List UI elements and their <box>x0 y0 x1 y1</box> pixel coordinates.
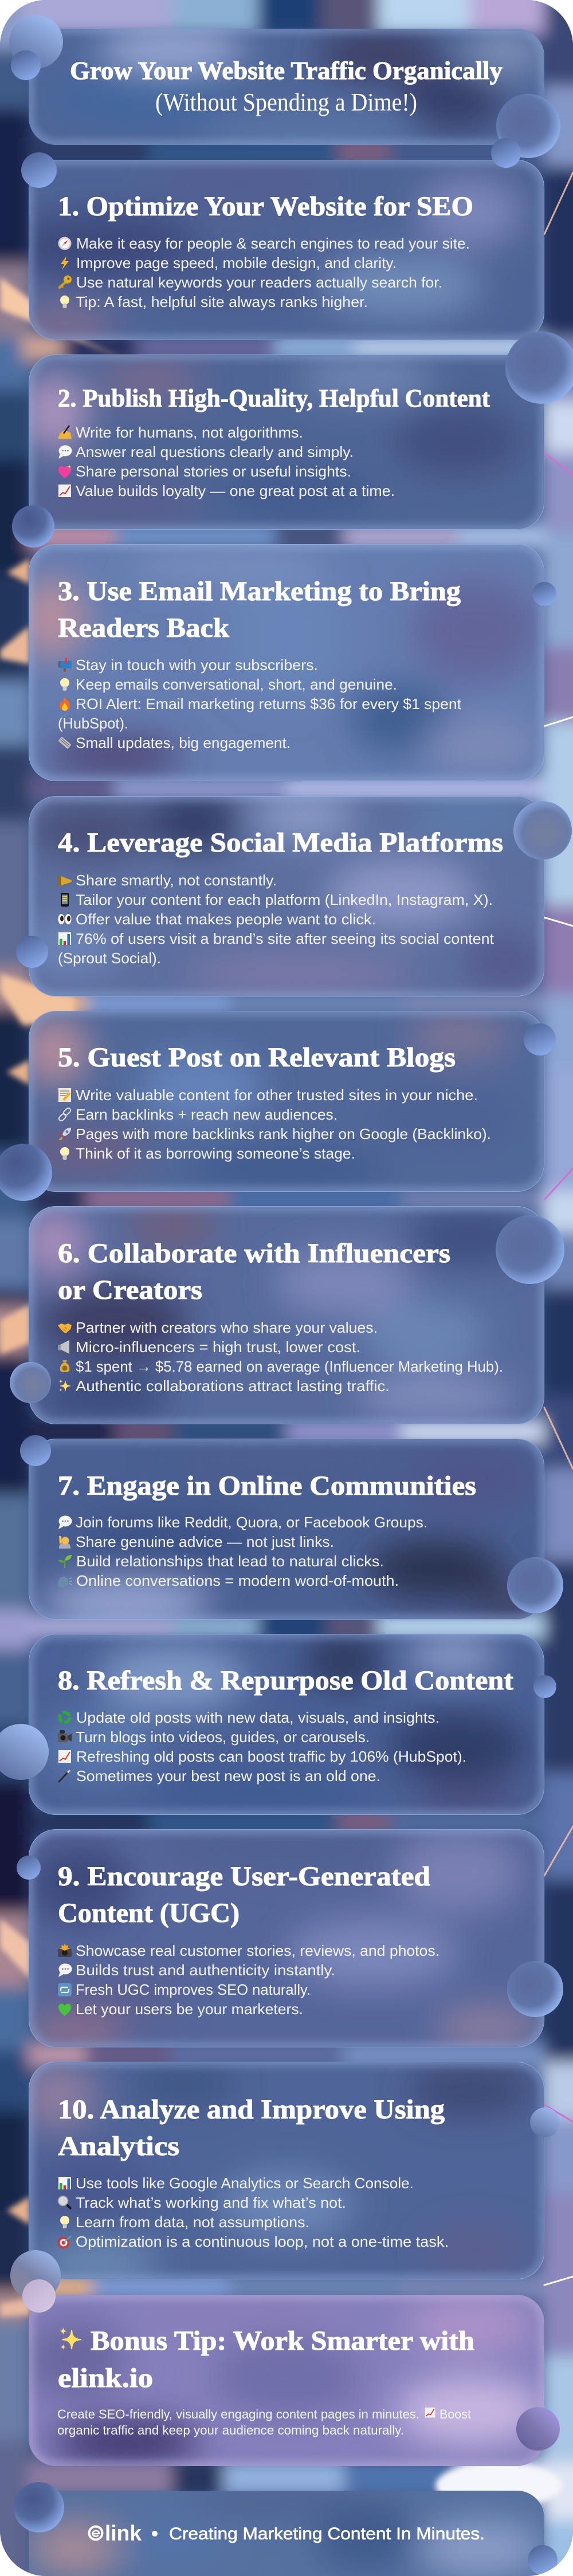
bullet list <box>58 1086 491 1162</box>
body text: organic traffic and keep your audience coming back naturally. <box>57 2423 404 2437</box>
bullet list: Make it easy for people & search engines to read your site. <box>76 235 470 252</box>
sphere: header right small <box>491 138 521 168</box>
sphere: panel 3 right <box>532 582 556 606</box>
sphere: panel 6 left <box>10 1362 51 1403</box>
heading: Bonus Tip: Work Smarter with <box>91 2326 474 2356</box>
bullet list <box>58 1942 439 2018</box>
bullet list: Join forums like Reddit, Quora, or Facebook Groups. <box>76 1514 427 1531</box>
panel 2 glass <box>20 355 544 530</box>
bullet list: Write for humans, not algorithms. <box>76 424 303 441</box>
panel: 1 optimize for SEO <box>6 157 544 349</box>
heading: 2. Publish High-Quality, Helpful Content <box>58 384 490 412</box>
sphere: panel 8 right <box>533 1675 556 1698</box>
sphere: panel 8 left <box>0 1724 49 1780</box>
bullet list: Builds trust and authenticity instantly. <box>76 1961 335 1979</box>
heading: 10. Analyze and Improve Using <box>58 2094 445 2125</box>
panel 7 glass <box>29 1439 550 1626</box>
bullet list <box>58 1514 427 1589</box>
sphere: panel 10 bottom left <box>10 2250 61 2301</box>
bullet list <box>58 1709 466 1785</box>
bonus panel glass <box>23 2295 544 2466</box>
logo: elink <box>89 2522 142 2546</box>
subtitle: (Without Spending a Dime!) <box>155 88 417 116</box>
heading: 6. Collaborate with Influencers <box>58 1238 450 1269</box>
sphere: footer right <box>528 2545 558 2575</box>
sphere: panel 2 right <box>505 332 573 404</box>
bullet list: Track what’s working and fix what’s not. <box>76 2194 346 2211</box>
panel: header <box>29 26 544 152</box>
heading: 5. Guest Post on Relevant Blogs <box>58 1042 456 1073</box>
bullet list: Micro-influencers = high trust, lower cost. <box>76 1338 360 1356</box>
sphere: panel 5 left <box>0 1144 52 1201</box>
bullet list: Share personal stories or useful insights. <box>76 463 351 480</box>
logo: elink: link <box>105 2522 142 2546</box>
sphere: panel 10 right <box>530 2108 560 2137</box>
bullet list: Learn from data, not assumptions. <box>76 2213 309 2231</box>
bullet list <box>58 424 395 499</box>
panel 4 glass <box>17 793 544 996</box>
bullet list: Tailor your content for each platform (LinkedIn, Instagram, X). <box>76 891 493 908</box>
panel: 10 analytics <box>17 2062 544 2279</box>
heading: elink.io <box>58 2363 153 2393</box>
body text <box>57 2407 471 2437</box>
heading: 3. Use Email Marketing to Bring <box>58 576 461 606</box>
bullet list: Optimization is a continuous loop, not a one-time task. <box>76 2233 449 2250</box>
sphere: panel 6 right <box>496 1215 564 1284</box>
bullet list: Pages with more backlinks rank higher on Google (Backlinko). <box>76 1125 491 1143</box>
heading <box>58 2094 445 2161</box>
sphere: top left small <box>11 50 41 80</box>
bullet list <box>58 872 494 967</box>
bullet list: (HubSpot). <box>58 715 128 732</box>
sphere: top left large <box>9 15 63 69</box>
heading: 4. Leverage Social Media Platforms <box>58 828 503 858</box>
sphere: panel 7 left <box>20 1435 51 1466</box>
sphere: footer left <box>14 2482 64 2532</box>
bullet list <box>58 2175 449 2250</box>
bullet list: Build relationships that lead to natural clicks. <box>76 1553 384 1570</box>
panel: 5 guest post <box>20 1011 544 1192</box>
panel 8 glass <box>29 1632 544 1815</box>
icon: sparkles <box>59 2327 81 2350</box>
panel: footer <box>29 2491 544 2576</box>
panel 6 glass <box>20 1203 544 1424</box>
sphere: panel 4 right <box>513 801 572 860</box>
bullet list: Use natural keywords your readers actually search for. <box>76 274 442 291</box>
bullet list: Sometimes your best new post is an old one. <box>76 1767 380 1785</box>
heading: 1. Optimize Your Website for SEO <box>58 191 473 222</box>
bullet list: (Sprout Social). <box>58 950 161 967</box>
bullet list: Let your users be your marketers. <box>76 2000 303 2018</box>
body text: Boost <box>439 2407 471 2421</box>
body text: Create SEO-friendly, visually engaging content pages in minutes. <box>57 2407 419 2421</box>
heading: or Creators <box>58 1275 202 1305</box>
bullet list: Use tools like Google Analytics or Search Console. <box>76 2175 414 2192</box>
bullet list: Partner with creators who share your values. <box>76 1319 378 1336</box>
sphere: panel 1 left <box>21 152 57 188</box>
sphere: panel 9 left <box>17 1856 41 1880</box>
bullet list: Showcase real customer stories, reviews, and photos. <box>76 1942 439 1959</box>
heading: 8. Refresh & Repurpose Old Content <box>58 1665 513 1696</box>
bullet list: Authentic collaborations attract lasting traffic. <box>76 1377 390 1395</box>
bullet list: Refreshing old posts can boost traffic by 106% (HubSpot). <box>76 1748 466 1765</box>
bullet list: Turn blogs into videos, guides, or carousels. <box>76 1728 370 1746</box>
bullet list: Tip: A fast, helpful site always ranks higher. <box>76 293 368 310</box>
heading: 7. Engage in Online Communities <box>58 1471 476 1501</box>
panel: 4 social media <box>17 793 544 996</box>
title: Grow Your Website Traffic Organically <box>70 57 503 85</box>
bullet list: Earn backlinks + reach new audiences. <box>76 1106 337 1123</box>
panel: 2 publish content <box>20 355 544 530</box>
header panel glass <box>29 26 544 152</box>
bullet list: Share smartly, not constantly. <box>76 872 277 889</box>
bullet list: Offer value that makes people want to click. <box>76 911 376 928</box>
bullet list: Answer real questions clearly and simply. <box>76 443 354 460</box>
bullet list: Small updates, big engagement. <box>76 734 291 751</box>
bullet list: ROI Alert: Email marketing returns $36 for every $1 spent <box>76 695 462 712</box>
heading <box>58 2326 474 2393</box>
bullet list: Improve page speed, mobile design, and clarity. <box>76 254 397 271</box>
bullet list: Share genuine advice — not just links. <box>76 1533 334 1550</box>
sphere: panel 2 left <box>12 505 54 548</box>
heading: 9. Encourage User-Generated <box>58 1861 430 1892</box>
footer panel glass <box>29 2491 544 2576</box>
heading: Analytics <box>58 2131 179 2161</box>
bullet list: 76% of users visit a brand’s site after seeing its social content <box>76 930 494 947</box>
bullet list: $1 spent → $5.78 earned on average (Influencer Marketing Hub). <box>76 1358 503 1375</box>
panel: 8 refresh content <box>29 1632 544 1815</box>
panel 1 glass <box>6 157 544 349</box>
sphere: bonus top left <box>22 2279 56 2313</box>
panel: bonus tip <box>23 2295 544 2466</box>
bullet list: Update old posts with new data, visuals, and insights. <box>76 1709 439 1726</box>
sphere: panel 9 right <box>507 1961 563 2017</box>
panel 10 glass <box>17 2062 544 2279</box>
bullet list: Fresh UGC improves SEO naturally. <box>76 1981 311 1998</box>
panel: 6 influencers <box>20 1203 544 1424</box>
sphere: bonus right <box>516 2407 560 2451</box>
heading: Content (UGC) <box>58 1898 240 1928</box>
panel: 3 email marketing <box>17 544 544 781</box>
bullet list: Write valuable content for other trusted sites in your niche. <box>76 1086 478 1104</box>
heading: Readers Back <box>58 613 229 643</box>
sphere: panel 7 right <box>507 1557 563 1613</box>
bullet list: Value builds loyalty — one great post at a time. <box>76 482 395 499</box>
bullet list <box>58 235 470 310</box>
panel 3 glass <box>17 544 544 781</box>
panel 5 glass <box>20 1011 544 1192</box>
bullet list: Online conversations = modern word-of-mouth. <box>76 1572 399 1589</box>
panel 9 glass <box>23 1829 544 2047</box>
panel: 7 online communities <box>29 1439 550 1626</box>
bullet list: Think of it as borrowing someone’s stage. <box>76 1145 355 1162</box>
bullet list <box>58 1319 503 1395</box>
tagline: Creating Marketing Content In Minutes. <box>169 2524 485 2543</box>
bullet list <box>58 656 462 751</box>
heading <box>58 1238 450 1305</box>
bullet list: Stay in touch with your subscribers. <box>76 656 318 673</box>
sphere: header right <box>496 94 560 158</box>
separator dot <box>152 2531 158 2536</box>
sphere: panel 5 right <box>524 1023 556 1055</box>
panel: 9 user-generated content <box>23 1829 544 2047</box>
bullet list: Keep emails conversational, short, and genuine. <box>76 676 397 693</box>
heading <box>58 576 461 643</box>
sphere: panel 4 left <box>16 936 48 968</box>
heading <box>58 1861 430 1928</box>
